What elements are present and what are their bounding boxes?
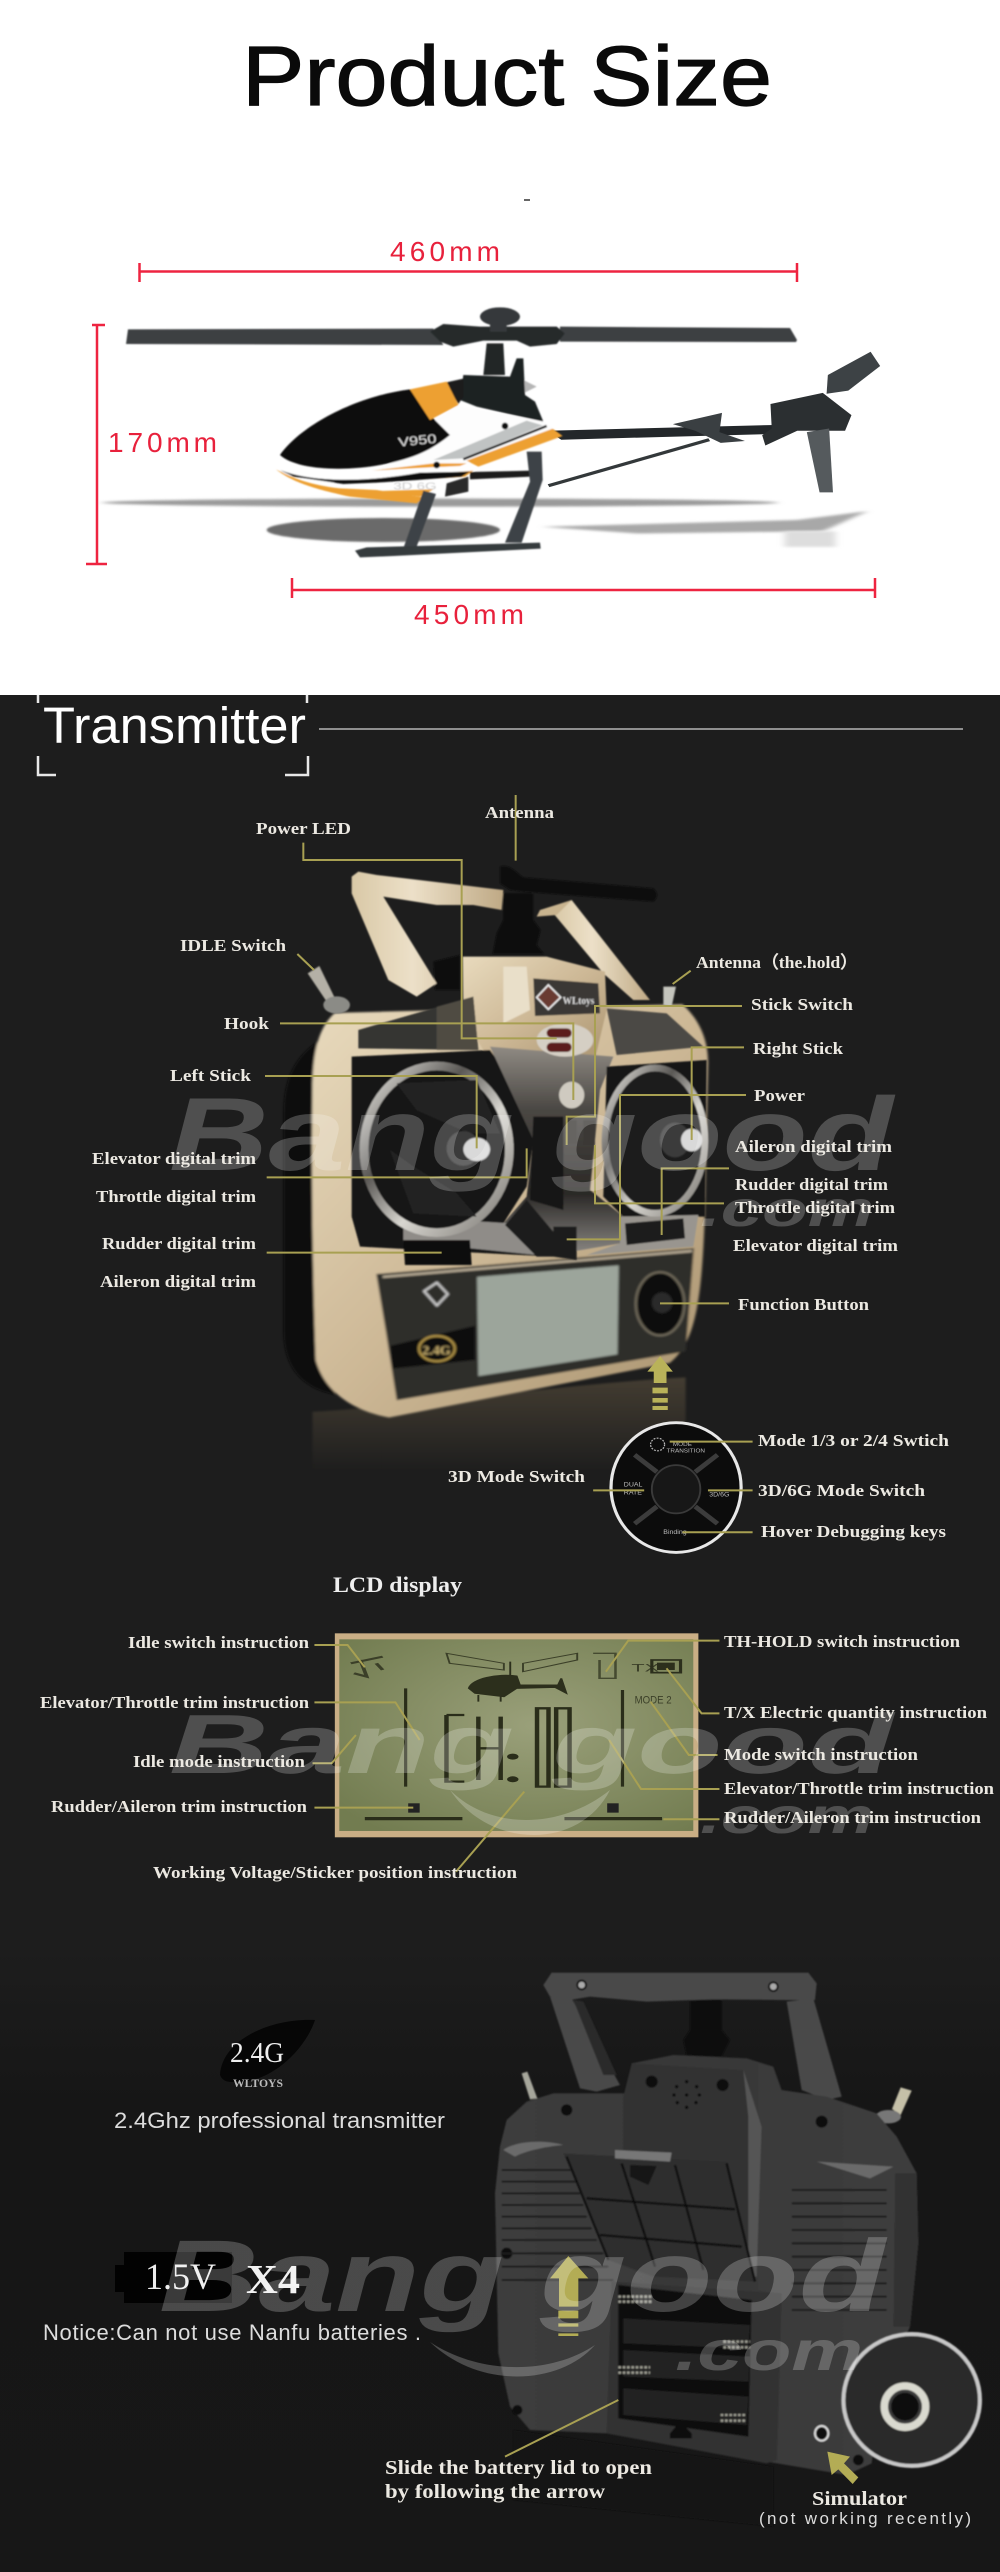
dimension: blade span 460mm: 460mm: [390, 236, 500, 267]
labels: LCD display: Idle switch instruction: [128, 1633, 310, 1652]
notice text: Notice:Can not use Nanfu batteries .: [43, 2320, 421, 2345]
dimension: length 450mm: 450mm: [414, 599, 524, 630]
watermark: Banggood 1: good: [551, 1077, 896, 1193]
labels: LCD display: Elevator/Throttle trim instruction: [724, 1779, 995, 1798]
labels: transmitter parts: Elevator digital trim: [92, 1149, 256, 1168]
callout: zoomed button dial: TRANSITION: [667, 1449, 705, 1454]
callout: zoomed button dial: MODE: [673, 1442, 692, 1448]
watermark: Banggood 2: good: [550, 1697, 896, 1791]
labels: transmitter parts: Rudder digital trim: [102, 1234, 256, 1253]
watermark: Banggood 1: .com: [700, 1181, 874, 1237]
leader lines: transmitter callouts: [265, 790, 746, 1303]
labels: transmitter parts: Antenna: [485, 803, 555, 822]
battery badge: 1.5V X4: 1.5V: [145, 2257, 216, 2298]
watermark: Banggood 3: Bang: [159, 2219, 504, 2333]
labels: transmitter parts: Aileron digital trim: [735, 1137, 892, 1156]
helicopter illustration: V950: [398, 432, 437, 450]
labels: transmitter parts: Hook: [224, 1014, 270, 1033]
lower body: [284, 1004, 708, 1472]
upper body detail: WLtoys: [563, 996, 594, 1007]
watermark: Banggood 1: Bang: [169, 1077, 514, 1193]
battery badge: 1.5V X4: [115, 2252, 300, 2303]
transmitter back photo: [495, 1973, 980, 2527]
labels: transmitter parts: 3D/6G Mode Switch: [758, 1481, 926, 1500]
watermark: Banggood 2: Bang: [169, 1697, 514, 1791]
labels: transmitter parts: Stick Switch: [751, 995, 854, 1014]
labels: transmitter parts: Mode 1/3 or 2/4 Swtich: [758, 1431, 950, 1450]
watermark: Banggood 3: .com: [675, 2319, 863, 2382]
labels: back of transmitter: Simulator: [812, 2488, 907, 2510]
helicopter illustration: 3D 6G: [393, 481, 437, 492]
lower body: 2.4G: [422, 1343, 451, 1357]
labels: transmitter parts: Throttle digital trim: [96, 1187, 256, 1206]
heading: Transmitter with bracket: [38, 695, 963, 775]
heading: Transmitter with bracket: Transmitter: [43, 697, 306, 754]
labels: transmitter parts: Function Button: [738, 1295, 870, 1314]
arrow: slide direction: [550, 2256, 588, 2336]
callout: zoomed button dial: Binding: [663, 1529, 687, 1536]
labels: LCD display: Working Voltage/Sticker position instruction: [153, 1863, 518, 1882]
transmitter front photo: [265, 790, 753, 1552]
labels: transmitter parts: Rudder digital trim: [735, 1175, 888, 1194]
logo: 2.4G WLTOYS: [220, 2020, 315, 2090]
dimension: height 170mm: 170mm: [108, 427, 217, 458]
labels: transmitter parts: Right Stick: [753, 1039, 844, 1058]
LCD display screen: TX: [631, 1661, 660, 1674]
leader line: battery lid: [505, 2400, 618, 2457]
labels: LCD display: Rudder/Aileron trim instruction: [51, 1797, 308, 1816]
callout: zoomed button dial: 3D/6G: [709, 1492, 729, 1499]
arrow: up to function panel: [647, 1356, 673, 1410]
panel: product size: [0, 0, 1000, 695]
labels: LCD display: Mode switch instruction: [724, 1745, 919, 1764]
labels: transmitter parts: Elevator digital trim: [733, 1236, 898, 1255]
labels: transmitter parts: Power: [754, 1086, 805, 1105]
title: Product Size: Product Size: [242, 29, 772, 123]
labels: transmitter parts: Power LED: [256, 819, 351, 838]
logo: 2.4G WLTOYS: WLTOYS: [233, 2076, 283, 2090]
watermark: Banggood 3: [159, 2219, 889, 2382]
labels: transmitter parts: IDLE Switch: [180, 936, 287, 955]
callout: zoomed button dial: DUAL: [624, 1482, 643, 1488]
labels: LCD display: Rudder/Aileron trim instruction: [724, 1808, 982, 1827]
LCD display screen: [313, 1633, 719, 1872]
labels: transmitter parts: 3D Mode Switch: [448, 1467, 586, 1486]
logo: 2.4G WLTOYS: 2.4G: [230, 2037, 284, 2069]
labels: LCD display: TH-HOLD switch instruction: [724, 1632, 961, 1651]
upper body detail: [308, 866, 707, 1265]
labels: LCD display: [40, 1632, 995, 1882]
speck: [524, 199, 530, 201]
battery badge: 1.5V X4: X4: [246, 2256, 300, 2302]
labels: LCD display: Elevator/Throttle trim instruction: [40, 1693, 310, 1712]
labels: back of transmitter: by following the arrow: [385, 2481, 606, 2503]
helicopter illustration: [102, 307, 880, 557]
simulator socket close-up: [843, 2334, 980, 2466]
labels: back of transmitter: Slide the battery lid to open: [385, 2457, 652, 2479]
labels: transmitter parts: Throttle digital trim: [735, 1198, 895, 1217]
text: 2.4Ghz professional transmitter: 2.4Ghz professional transmitter: [114, 2108, 445, 2133]
panel: transmitter background: [0, 695, 1000, 1950]
heading: LCD display: LCD display: [333, 1572, 462, 1597]
leader lines: dial callouts: [593, 1442, 753, 1532]
watermark: Banggood 2: [169, 1697, 896, 1844]
labels: transmitter parts: Hover Debugging keys: [761, 1522, 946, 1541]
callout: zoomed button dial: [611, 1423, 741, 1552]
labels: transmitter parts: [92, 803, 950, 1541]
watermark: Banggood 1: [169, 1077, 896, 1237]
labels: LCD display: Idle mode instruction: [133, 1752, 306, 1771]
labels: transmitter parts: Antenna（the.hold）: [696, 952, 858, 972]
note: simulator not working: (not working recently): [759, 2509, 971, 2528]
arrow: simulator jack: [827, 2452, 858, 2484]
watermark: Banggood 3: good: [539, 2219, 889, 2333]
watermark: Banggood 2: .com: [700, 1788, 874, 1844]
LCD display screen: MODE 2: [635, 1693, 672, 1706]
labels: transmitter parts: Left Stick: [170, 1066, 252, 1085]
labels: transmitter parts: Aileron digital trim: [100, 1272, 256, 1291]
labels: back of transmitter: [385, 2457, 907, 2510]
labels: LCD display: T/X Electric quantity instruction: [724, 1703, 988, 1722]
callout: zoomed button dial: RATE: [624, 1490, 642, 1496]
panel: lower background: [0, 1950, 1000, 2572]
